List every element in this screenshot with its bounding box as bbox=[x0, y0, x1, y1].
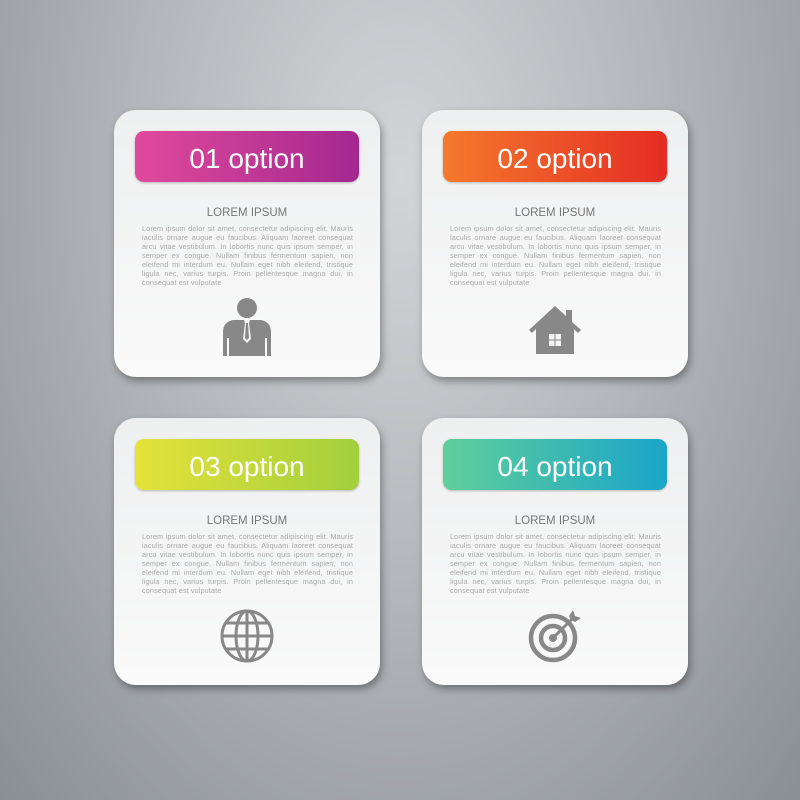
heading 2: LOREM IPSUM bbox=[515, 207, 595, 219]
text 2: Lorem ipsum dolor sit amet, consectetur adipiscing elit. Mauris iaculis ornare augue eu faucibus. Aliquam laoreet consequat arcu vitae vestibulum. In lobortis nunc quis ipsum semper, in semper ex congue. Nullam finibus fermentum sapien, non eleifend mi interdum eu. Nullam eget nibh eleifend, tristique ligula nec, varius turpis. Proin pellentesque magna dui, in consequat est vulputate bbox=[450, 224, 661, 287]
icon: globe bbox=[220, 610, 274, 662]
header bar 3 bbox=[135, 439, 359, 490]
card 3 bbox=[114, 418, 380, 685]
icon: house bbox=[529, 306, 581, 354]
header bar 1: 01 option bbox=[189, 143, 305, 174]
header bar 3: 03 option bbox=[189, 451, 305, 482]
header bar 1 bbox=[135, 131, 359, 182]
header bar 4: 04 option bbox=[497, 451, 613, 482]
heading 3: LOREM IPSUM bbox=[207, 515, 287, 527]
icon: target bbox=[528, 610, 581, 662]
text 4: Lorem ipsum dolor sit amet, consectetur adipiscing elit. Mauris iaculis ornare augue eu faucibus. Aliquam laoreet consequat arcu vitae vestibulum. In lobortis nunc quis ipsum semper, in semper ex congue. Nullam finibus fermentum sapien, non eleifend mi interdum eu. Nullam eget nibh eleifend, tristique ligula nec, varius turpis. Proin pellentesque magna dui, in consequat est vulputate bbox=[450, 532, 661, 595]
text 3: Lorem ipsum dolor sit amet, consectetur adipiscing elit. Mauris iaculis ornare augue eu faucibus. Aliquam laoreet consequat arcu vitae vestibulum. In lobortis nunc quis ipsum semper, in semper ex congue. Nullam finibus fermentum sapien, non eleifend mi interdum eu. Nullam eget nibh eleifend, tristique ligula nec, varius turpis. Proin pellentesque magna dui, in consequat est vulputate bbox=[142, 532, 353, 595]
icon: person bbox=[223, 298, 271, 356]
header bar 2: 02 option bbox=[497, 143, 613, 174]
header bar 4 bbox=[443, 439, 667, 490]
header bar 2 bbox=[443, 131, 667, 182]
card 2 bbox=[422, 110, 688, 377]
heading 4: LOREM IPSUM bbox=[515, 515, 595, 527]
text 1: Lorem ipsum dolor sit amet, consectetur adipiscing elit. Mauris iaculis ornare augue eu faucibus. Aliquam laoreet consequat arcu vitae vestibulum. In lobortis nunc quis ipsum semper, in semper ex congue. Nullam finibus fermentum sapien, non eleifend mi interdum eu. Nullam eget nibh eleifend, tristique ligula nec, varius turpis. Proin pellentesque magna dui, in consequat est vulputate bbox=[142, 224, 353, 287]
heading 1: LOREM IPSUM bbox=[207, 207, 287, 219]
card 1 bbox=[114, 110, 380, 377]
card 4 bbox=[422, 418, 688, 685]
